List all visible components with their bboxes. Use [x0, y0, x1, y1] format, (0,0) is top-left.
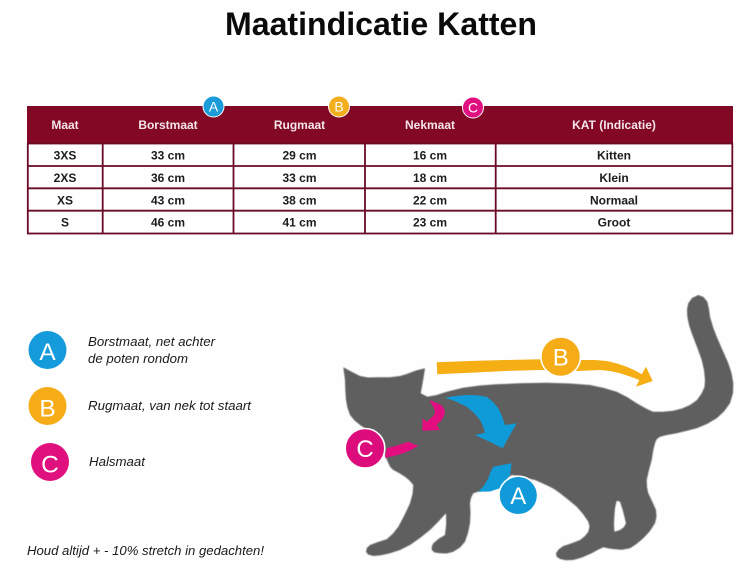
arrow: B back arrow [437, 359, 653, 387]
legend icon: C: C [41, 452, 59, 478]
row: 2XS [54, 171, 629, 185]
arrow: C lower magenta band [385, 442, 418, 458]
row: 2XS: 18 cm [413, 171, 447, 185]
row: S: 46 cm [151, 216, 185, 230]
legend text: A: de poten rondom [88, 351, 188, 366]
badge: table C: C [468, 100, 478, 116]
icon: cat silhouette [343, 295, 733, 560]
cat diagram [343, 295, 733, 560]
row: 2XS: Klein [599, 171, 629, 185]
table header [27, 106, 733, 144]
row: 3XS: 16 cm [413, 148, 447, 162]
table header: Maat [51, 118, 79, 132]
row: S [61, 216, 630, 230]
table body grid [27, 143, 733, 234]
title: Maatindicatie Katten [225, 6, 537, 42]
legend icon: B [28, 387, 66, 425]
row: 3XS: Kitten [597, 148, 631, 162]
table header: Rugmaat [274, 118, 325, 132]
badge: cat B: B [553, 344, 569, 372]
badge: cat A [499, 476, 538, 515]
badge: cat C: C [356, 436, 374, 463]
row: S: 23 cm [413, 216, 447, 230]
badge: table A [203, 96, 224, 117]
row: XS: Normaal [590, 193, 638, 207]
badge: table B: B [334, 98, 344, 114]
row: 3XS: 3XS [54, 148, 76, 162]
row: 3XS [54, 148, 631, 162]
row: 2XS: 2XS [54, 171, 76, 185]
legend text: C: Halsmaat [89, 454, 146, 469]
table header: KAT (Indicatie) [572, 118, 656, 132]
row: 3XS: 29 cm [282, 148, 317, 162]
badge: cat B [541, 337, 580, 377]
legend icon: A [28, 331, 66, 369]
legend icon: A: A [39, 339, 56, 366]
row: 2XS: 36 cm [151, 171, 185, 185]
arrow: A upper blue arrow [445, 395, 517, 448]
row: XS: 22 cm [413, 193, 447, 207]
row: XS: XS [57, 193, 73, 207]
legend text: A [88, 334, 216, 366]
arrow: C upper magenta arrow [422, 400, 445, 431]
table header: Borstmaat [138, 118, 198, 132]
badge: cat A: A [510, 483, 526, 510]
row: XS: 38 cm [282, 193, 317, 207]
arrow: A lower blue curve [478, 463, 512, 492]
legend text: A: Borstmaat, net achter [88, 334, 216, 349]
badge: cat C [345, 428, 385, 468]
stretch note: Houd altijd + - 10% stretch in gedachten! [27, 543, 264, 558]
row: S: S [61, 216, 69, 230]
legend text: B: Rugmaat, van nek tot staart [88, 398, 252, 413]
legend icon: C [31, 443, 69, 481]
legend icon: B: B [39, 396, 56, 422]
badge: table B [328, 96, 350, 117]
size table [27, 106, 733, 234]
table header: Nekmaat [405, 118, 455, 132]
row: 3XS: 33 cm [151, 148, 185, 162]
row: 2XS: 33 cm [282, 171, 317, 185]
row: S: Groot [598, 216, 630, 230]
row: XS [57, 193, 638, 207]
badge: table A: A [209, 98, 219, 114]
row: S: 41 cm [282, 216, 317, 230]
badge: table C [462, 97, 484, 118]
row: XS: 43 cm [151, 193, 185, 207]
